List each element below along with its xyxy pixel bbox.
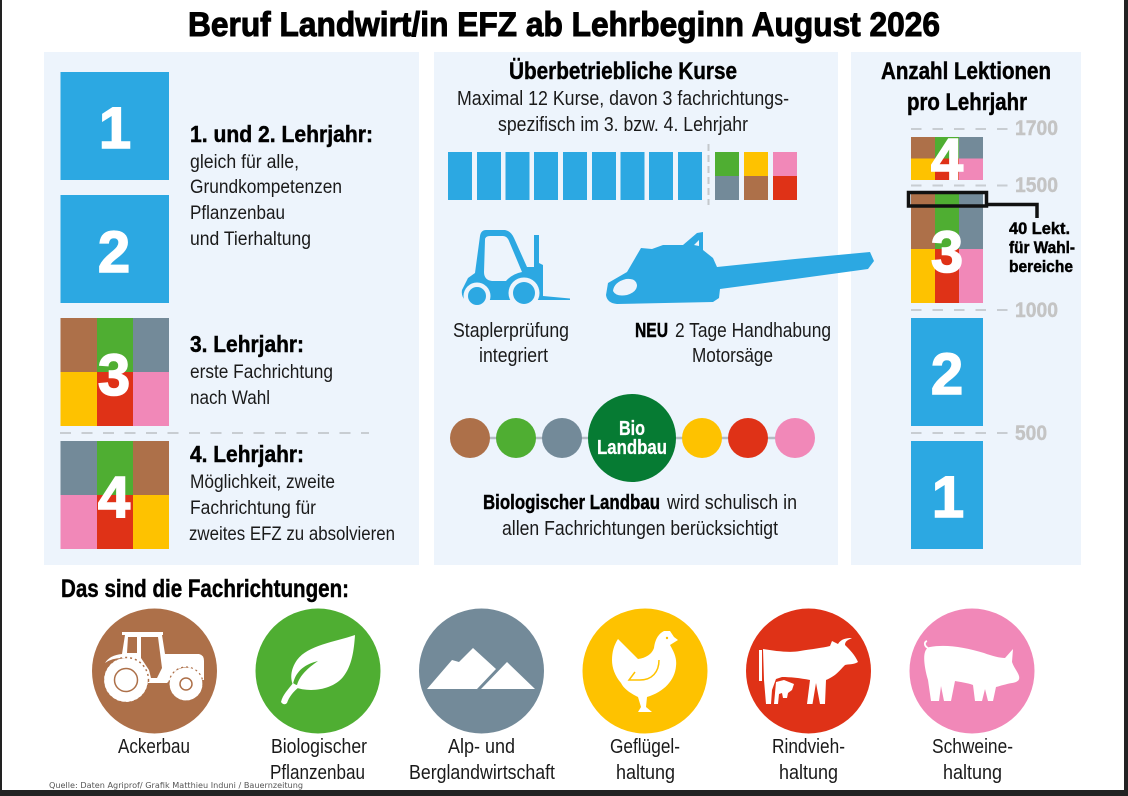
label	[772, 736, 845, 784]
icon: cow	[759, 638, 858, 704]
icon: chainsaw	[606, 232, 874, 304]
callout: 40 Lektionen: 40 Lekt.	[1009, 219, 1070, 238]
label	[932, 736, 1013, 784]
scale: 500	[1015, 422, 1047, 445]
heading	[881, 58, 1051, 116]
label: Motorsäge: NEU	[635, 320, 668, 342]
label: Staplerprüfung	[453, 320, 569, 367]
course bars: 3 specialised	[715, 152, 797, 200]
text: 1. und 2. Lehrjahr: Pflanzenbau	[190, 203, 285, 224]
callout: 40 Lektionen	[908, 192, 1075, 276]
label: Alp- und	[448, 736, 515, 758]
intro text: Maximal 12 Kurse, davon 3 fachrichtungs-	[457, 88, 789, 110]
scale: 1500	[1015, 174, 1058, 197]
label	[270, 736, 367, 784]
icon: tractor	[104, 632, 204, 702]
text: 4. Lehrjahr	[189, 441, 395, 545]
label: Pflanzenbau	[270, 762, 365, 784]
label: Staplerprüfung: Staplerprüfung	[453, 320, 569, 342]
callout: 40 Lektionen: für Wahl-	[1009, 238, 1075, 257]
label: Staplerprüfung: integriert	[479, 345, 548, 367]
text: 4. Lehrjahr: zweites EFZ zu absolvieren	[189, 524, 395, 545]
text: 4. Lehrjahr: Möglichkeit, zweite	[190, 472, 335, 493]
icon: leaf	[281, 635, 355, 704]
heading: Anzahl Lektionen	[881, 58, 1051, 85]
text: 3. Lehrjahr	[190, 331, 333, 409]
label: Ackerbau	[118, 736, 190, 758]
year 1 block: 1	[99, 96, 131, 161]
scale: 1700	[1015, 117, 1058, 140]
label: Motorsäge: 2 Tage Handhabung	[675, 320, 831, 342]
stack: year 3: 3	[931, 220, 963, 285]
icon: chicken	[612, 631, 678, 712]
year 4 block: 4	[98, 465, 130, 530]
text: Biologischer Landbau	[483, 492, 797, 540]
stack: year 2: 2	[931, 342, 963, 407]
label: Schweine-	[932, 736, 1013, 758]
label: Motorsäge: Motorsäge	[692, 345, 773, 367]
course bars: 9 general	[448, 152, 702, 200]
year 3 block: 3	[98, 343, 130, 408]
year 1 block	[60, 72, 169, 180]
text: 4. Lehrjahr: 4. Lehrjahr:	[190, 441, 304, 467]
label: haltung	[616, 762, 675, 784]
label	[610, 736, 680, 784]
scale	[911, 117, 1058, 445]
callout: 40 Lektionen: bereiche	[1009, 257, 1073, 276]
specialisation: Rindviehhaltung	[746, 608, 871, 784]
specialisation: Alp- und Berglandwirtschaft	[409, 608, 555, 784]
stack: year 4: 4	[931, 127, 963, 192]
panel: Überbetriebliche Kurse	[434, 52, 838, 565]
heading: pro Lehrjahr	[907, 89, 1027, 116]
diagram: Bio Landbau circles: Landbau	[597, 437, 667, 459]
diagram: Bio Landbau circles: Bio	[619, 418, 645, 440]
year 4 block	[60, 441, 169, 549]
panel: Anzahl Lektionen	[851, 52, 1081, 565]
text: 4. Lehrjahr: Fachrichtung für	[190, 498, 317, 519]
label: haltung	[779, 762, 838, 784]
text: Biologischer Landbau: Biologischer Landbau	[483, 492, 660, 514]
stack: year 4	[911, 127, 983, 192]
text: 1. und 2. Lehrjahr: 1. und 2. Lehrjahr:	[190, 121, 373, 147]
text: 1. und 2. Lehrjahr	[190, 121, 373, 250]
stack: year 3	[911, 192, 983, 303]
year 3 block	[60, 318, 169, 426]
text: 3. Lehrjahr: nach Wahl	[190, 388, 270, 409]
year 2 block: 2	[98, 220, 130, 285]
label	[409, 736, 555, 784]
title: Beruf Landwirt/in EFZ ab Lehrbeginn August 2026	[188, 6, 940, 44]
label: Geflügel-	[610, 736, 680, 758]
text: 1. und 2. Lehrjahr: Grundkompetenzen	[190, 177, 342, 198]
text: 1. und 2. Lehrjahr: und Tierhaltung	[190, 229, 311, 250]
icon: forklift	[462, 230, 570, 310]
diagram: Bio Landbau circles	[450, 394, 815, 482]
intro text	[457, 88, 789, 136]
specialisation: Schweinehaltung	[910, 608, 1034, 784]
source credit: Quelle: Daten Agriprof/ Grafik Matthieu Induni / Bauernzeitung	[49, 781, 303, 790]
intro text: spezifisch im 3. bzw. 4. Lehrjahr	[498, 114, 748, 136]
icon: pig	[924, 641, 1019, 701]
icon: mountains	[427, 648, 535, 689]
stack: year 1	[911, 441, 983, 549]
panel: Lehrjahre	[44, 52, 419, 565]
text: 1. und 2. Lehrjahr: gleich für alle,	[190, 152, 299, 173]
stack: year 2	[911, 318, 983, 426]
specialisation: Ackerbau	[92, 608, 217, 758]
text: Biologischer Landbau: allen Fachrichtungen berücksichtigt	[502, 518, 778, 540]
scale: 1000	[1015, 299, 1058, 322]
heading: Überbetriebliche Kurse	[509, 58, 737, 85]
stack: year 1: 1	[932, 465, 964, 530]
text: Biologischer Landbau: wird schulisch in	[666, 492, 797, 514]
label: Motorsäge	[635, 320, 831, 367]
text: 3. Lehrjahr: 3. Lehrjahr:	[190, 331, 304, 357]
specialisation: Biologischer Pflanzenbau	[256, 608, 380, 784]
heading: Fachrichtungen: Das sind die Fachrichtungen:	[61, 575, 349, 603]
label: Biologischer	[271, 736, 367, 758]
label: Berglandwirtschaft	[409, 762, 555, 784]
label: haltung	[943, 762, 1002, 784]
text: 3. Lehrjahr: erste Fachrichtung	[190, 362, 333, 383]
label: Rindvieh-	[772, 736, 845, 758]
specialisation: Geflügelhaltung	[582, 608, 708, 784]
year 2 block	[60, 195, 169, 303]
